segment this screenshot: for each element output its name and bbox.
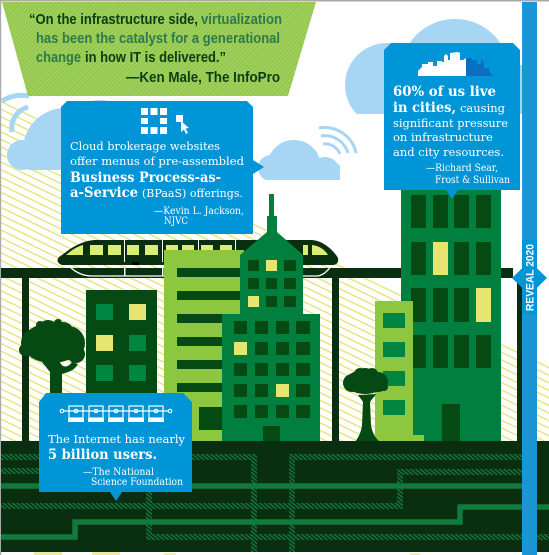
callout text: Business Process-as- — [70, 170, 221, 186]
callout text: —Richard Sear, — [426, 163, 498, 174]
monorail train — [58, 240, 338, 276]
bottom hatch fragments — [34, 552, 420, 555]
background hatch — [1, 100, 549, 441]
blue side strip — [512, 2, 547, 555]
tree: right — [343, 368, 388, 442]
callout text — [393, 84, 511, 186]
quote text — [29, 11, 282, 86]
building: light green narrow — [375, 301, 424, 442]
icon: left wifi arcs — [2, 95, 29, 132]
callout text — [48, 432, 185, 488]
panel: top quote — [2, 2, 316, 96]
cloud: middle — [258, 140, 340, 180]
callout: cloud brokerage — [61, 101, 264, 234]
callout text: NJVC — [164, 216, 188, 227]
callout text: causing — [460, 101, 506, 115]
quote text: virtualization — [201, 11, 282, 28]
callout text: offer menus of pre-assembled — [70, 154, 245, 168]
callout text: a-Service — [70, 185, 138, 201]
cloud: top right — [345, 19, 522, 114]
building: dark left — [86, 290, 157, 442]
tree: left — [19, 319, 85, 442]
quote text: “On the infrastructure side, — [29, 11, 198, 28]
quote text: change — [36, 49, 81, 66]
icon: connected laptops — [60, 406, 172, 422]
callout text: —Kevin L. Jackson, — [154, 206, 244, 217]
callout text — [70, 139, 245, 227]
callout text: in cities, — [393, 100, 456, 116]
callout: internet users — [39, 393, 192, 501]
solid circuit lines — [1, 486, 549, 537]
building: center tower — [222, 194, 320, 442]
callout text: significant pressure — [393, 116, 508, 130]
callout text: (BPaaS) offerings. — [142, 186, 243, 200]
elevated rail — [1, 268, 522, 443]
callout text: on infrastructure — [393, 130, 493, 144]
hatched circuit lines — [1, 457, 549, 552]
building: right tower — [401, 188, 501, 442]
callout text: Cloud brokerage websites — [70, 139, 220, 153]
callout text: and city resources. — [393, 145, 504, 159]
callout: cities — [384, 43, 520, 199]
icon: menu grid and cursor — [141, 108, 189, 134]
underground circuit panel — [1, 441, 549, 552]
icon: middle wifi arcs — [319, 127, 356, 154]
reveal tag — [512, 240, 547, 314]
icon: skyline — [418, 52, 493, 76]
callout text: Frost & Sullivan — [435, 175, 511, 186]
quote banner shape — [2, 2, 316, 96]
callout text: Science Foundation — [91, 477, 184, 488]
callout text: —The National — [83, 467, 154, 478]
building: light green wide — [164, 250, 244, 442]
callout text: 5 billion users. — [48, 447, 157, 463]
callout text: The Internet has nearly — [48, 432, 185, 446]
cloud: left — [7, 100, 108, 170]
quote text: has been the catalyst for a generational — [36, 30, 280, 47]
reveal label: REVEAL 2020 — [524, 244, 536, 311]
quote text: in how IT is delivered.” — [85, 49, 226, 66]
callout text: 60% of us live — [393, 84, 496, 100]
quote text: —Ken Male, The InfoPro — [126, 69, 280, 86]
